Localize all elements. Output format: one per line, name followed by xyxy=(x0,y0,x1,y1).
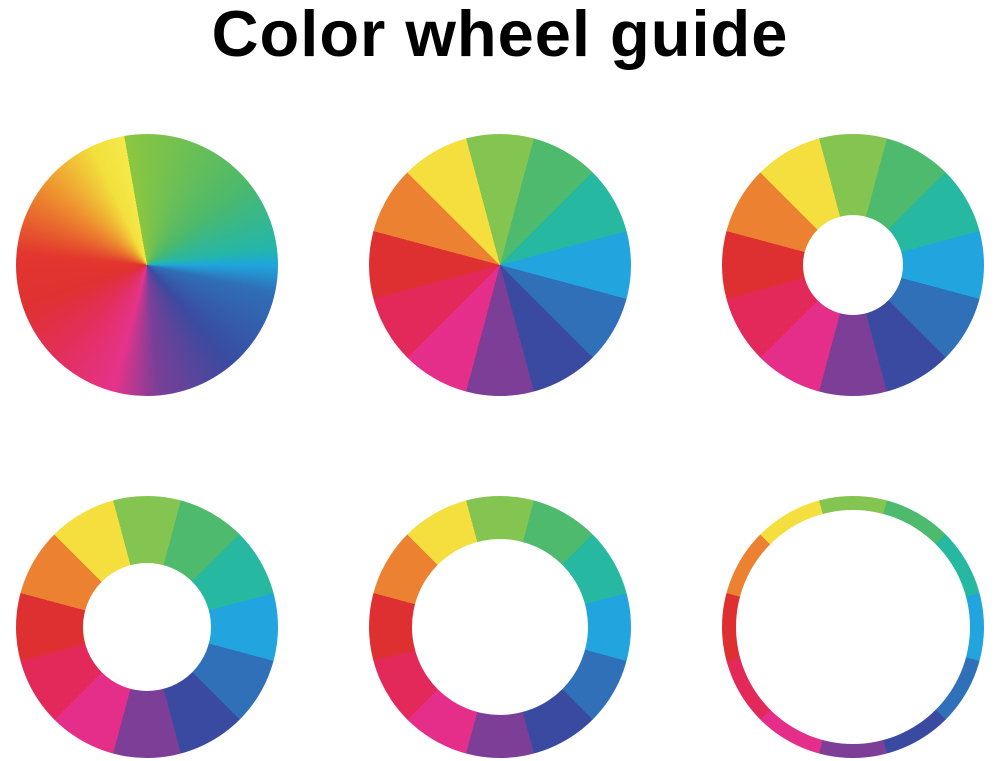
wheel: thin ring xyxy=(722,496,984,758)
wheel: segmented full xyxy=(369,134,631,396)
wheel: donut large hole xyxy=(369,496,631,758)
wheel: donut medium hole xyxy=(16,496,278,758)
wheel: gradient xyxy=(16,134,278,396)
wheel: donut small hole xyxy=(722,134,984,396)
